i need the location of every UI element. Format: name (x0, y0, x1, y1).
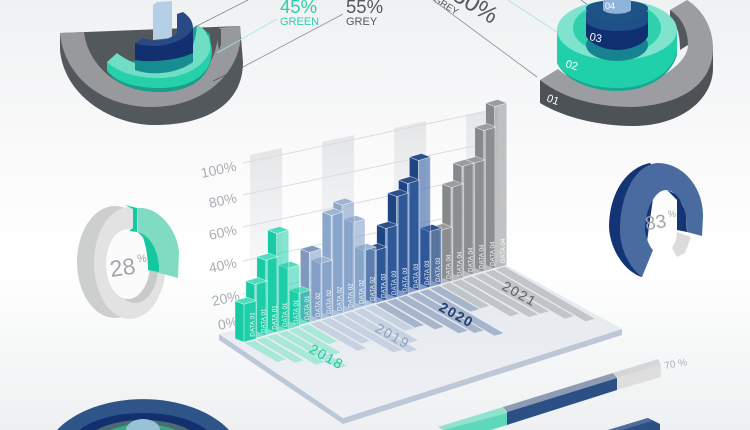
floor strips: 2019 (310, 305, 418, 352)
donut value: 28 (108, 253, 137, 282)
donut chart: 83% (609, 163, 703, 277)
bar 20 (442, 180, 464, 282)
donut chart: 28% (77, 205, 179, 319)
y axis labels: 40% (207, 254, 238, 276)
outer grey ring 01 (540, 0, 713, 126)
bar 5: DATA 01 (293, 299, 300, 324)
bar 18: DATA 03 (435, 257, 442, 282)
bar 10 (333, 198, 355, 313)
navy cylinder 03 (586, 0, 648, 61)
bar 1: DATA 01 (250, 312, 256, 337)
donut value: % (668, 209, 676, 219)
donut remainder stub (672, 232, 691, 257)
navy segment (503, 373, 617, 425)
grey segment (613, 359, 661, 390)
bar 1 (235, 297, 256, 342)
bar 22: DATA 04 (478, 244, 485, 269)
donut inner side (667, 190, 687, 232)
floor strips: 2018 (245, 324, 347, 368)
donut navy side (609, 163, 657, 277)
navy ring (135, 12, 193, 73)
y axis labels: 60% (207, 221, 238, 243)
bar 6 (290, 286, 311, 326)
bar 7 (300, 246, 322, 322)
bar 14 (377, 222, 398, 300)
bar 2: DATA 01 (260, 308, 267, 333)
bar 15 (388, 190, 409, 298)
outer grey ring 01: 01 (545, 93, 561, 108)
year labels on floor (307, 278, 540, 373)
label: 45% green (280, 0, 319, 28)
bar 9 (322, 208, 344, 316)
bar 16: DATA 03 (413, 263, 420, 288)
bar 8 (311, 256, 333, 320)
bar 23: DATA 04 (489, 241, 496, 266)
bottom-left ring chart (57, 399, 229, 430)
bar 11 (344, 216, 366, 310)
chart: top-left concentric half rings (60, 0, 343, 125)
bar 14: DATA 03 (391, 270, 398, 295)
bar chart: 24 isometric bars (235, 100, 507, 342)
donut grey body (77, 206, 166, 319)
bar 16 (398, 176, 420, 294)
bar 20: DATA 04 (457, 251, 464, 276)
bar 12 (355, 244, 376, 306)
leader lines (193, 0, 343, 81)
year labels on floor: 2018 (307, 341, 347, 373)
bar 12: DATA 02 (369, 276, 376, 301)
bar 9: DATA 02 (337, 286, 344, 311)
progress bar: 70% (438, 357, 688, 430)
bar 10: DATA 02 (348, 283, 355, 308)
bar 15: DATA 03 (402, 267, 409, 292)
bar 4: DATA 01 (282, 302, 289, 327)
donut value (644, 209, 676, 235)
bar 5 (279, 262, 300, 330)
light blue cylinder 04: 04 (605, 1, 615, 11)
green segment (438, 407, 507, 430)
label: 55% grey (346, 0, 383, 28)
bar 6: DATA 01 (304, 295, 311, 320)
leader lines (433, 0, 588, 77)
bar 23 (475, 124, 496, 272)
y axis labels: 0% (216, 313, 239, 333)
floor strips: 2021 (441, 267, 595, 321)
donut slate face (620, 163, 703, 277)
floor strips: 2020 (376, 286, 503, 336)
bar 19: DATA 04 (446, 254, 453, 279)
year labels on floor: 2020 (437, 299, 477, 331)
green ring (107, 25, 212, 92)
label: 55% grey: GREY (346, 16, 378, 28)
y axis labels: 100% (199, 158, 238, 181)
bar 2 (246, 278, 267, 338)
label: 45% green: GREEN (280, 16, 319, 28)
y axis labels: 20% (210, 287, 241, 309)
bar 21: DATA 04 (468, 247, 474, 272)
bar 4 (268, 226, 289, 332)
bar 13: DATA 03 (380, 273, 387, 298)
navy cylinder 03: 03 (588, 31, 603, 45)
green cylinder 02: 02 (564, 58, 579, 73)
light blue centre bar (153, 1, 172, 40)
light blue cylinder 04 (603, 0, 631, 14)
year labels on floor: 2021 (500, 278, 540, 310)
bar 17 (409, 154, 431, 290)
bar 3 (257, 253, 278, 335)
y axis labels (199, 158, 241, 333)
outer grey ring (60, 26, 243, 125)
donut value: 83 (644, 211, 668, 235)
bar 18 (420, 224, 442, 288)
bar 22 (464, 156, 485, 274)
bar 24: DATA 04 (500, 238, 507, 263)
bar value: 70 % (664, 357, 688, 372)
progress bar: second bar (608, 418, 660, 430)
bar 11: DATA 02 (358, 279, 366, 304)
chart wall: columns and grid lines (243, 108, 498, 328)
bar 8: DATA 02 (326, 289, 333, 314)
bar 24 (486, 100, 507, 268)
donut green slice (125, 205, 179, 278)
y axis labels: 80% (207, 189, 238, 211)
green cylinder 02 (557, 0, 677, 91)
chart: top-right concentric cylinders (433, 0, 713, 126)
bar 13 (366, 244, 387, 304)
bar 3: DATA 01 (271, 305, 278, 330)
bar 19 (431, 224, 453, 284)
floor platform (219, 262, 622, 424)
bar 21 (453, 160, 474, 278)
donut value: % (137, 253, 147, 265)
bar 17: DATA 03 (424, 260, 431, 285)
bar 7: DATA 02 (315, 292, 322, 317)
year labels on floor: 2019 (373, 320, 413, 352)
